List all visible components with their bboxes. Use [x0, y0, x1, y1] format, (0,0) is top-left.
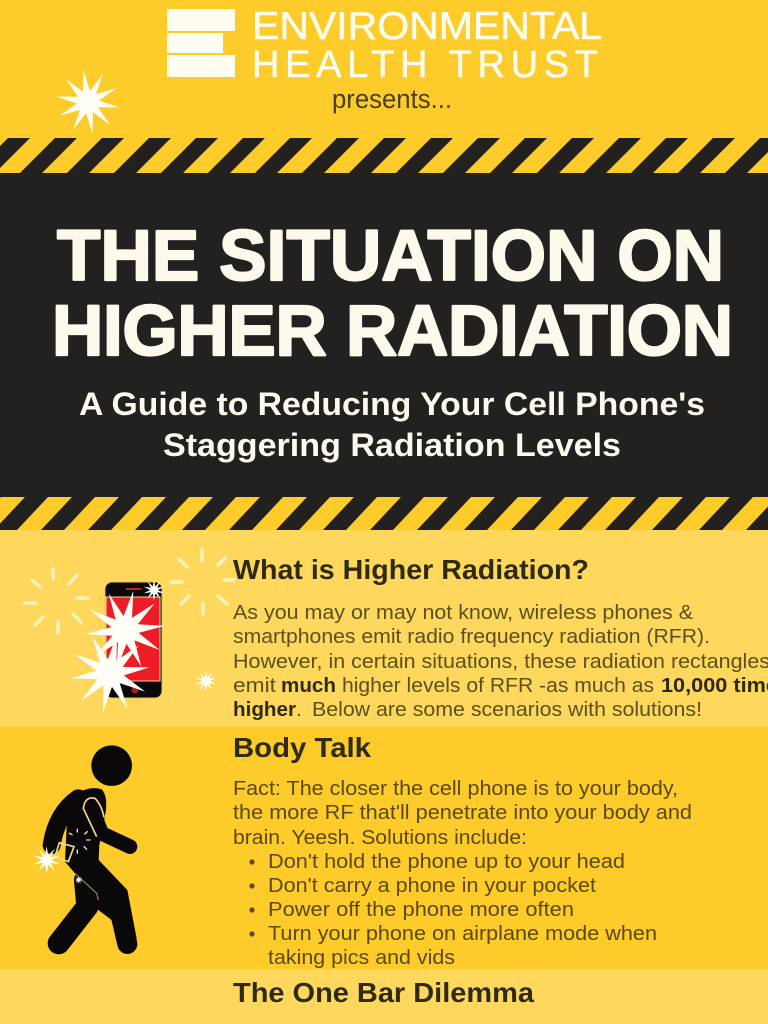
- hazard stripes: bottom: [0, 497, 768, 530]
- text block: Below are some scenarios with solutions!: [312, 698, 702, 721]
- icon: phone: [105, 582, 162, 698]
- text block: [233, 601, 768, 721]
- text block: emit: [233, 674, 276, 697]
- panel: title banner: [0, 173, 768, 498]
- icon: starburst cluster: [66, 579, 216, 719]
- panel: body talk: [0, 727, 768, 969]
- text block: the more RF that'll penetrate into your body and: [233, 801, 692, 824]
- logo: Environmental Health Trust: [167, 5, 602, 86]
- logo wordmark: HEALTH TRUST: [252, 44, 598, 86]
- text block: higher: [233, 698, 296, 721]
- text block: smartphones emit radio frequency radiation (RFR).: [233, 625, 710, 648]
- heading: The One Bar Dilemma: [233, 977, 535, 1008]
- radiation sparks: [69, 829, 90, 853]
- bullet list: Turn your phone on airplane mode when: [268, 922, 657, 945]
- text: presents: presents...: [332, 84, 452, 114]
- hazard stripes: top: [0, 138, 768, 173]
- logo wordmark: ENVIRONMENTAL: [252, 5, 602, 48]
- text block: As you may or may not know, wireless phones &: [233, 601, 693, 624]
- panel: what is higher radiation: [0, 530, 768, 727]
- title: HIGHER RADIATION: [52, 292, 733, 371]
- phone outline: [55, 843, 74, 862]
- text block: Fact: The closer the cell phone is to your body,: [233, 777, 678, 800]
- bullet list: taking pics and vids: [268, 946, 455, 969]
- text block: brain. Yeesh. Solutions include:: [233, 826, 527, 849]
- heading: What is Higher Radiation?: [233, 554, 589, 585]
- bullet list: [249, 850, 657, 969]
- icon: radiation rays right: [171, 549, 234, 614]
- title: [52, 217, 733, 371]
- title: THE SITUATION ON: [57, 217, 724, 296]
- icon: radiation rays left: [25, 569, 88, 633]
- icon: logo blocks: [167, 9, 235, 77]
- subtitle: [79, 386, 705, 463]
- bullet list: Don't hold the phone up to your head: [268, 850, 625, 873]
- text block: .: [296, 698, 302, 721]
- bullet list: Power off the phone more often: [268, 898, 574, 921]
- bullet list: Don't carry a phone in your pocket: [268, 874, 596, 897]
- logo wordmark: [252, 5, 602, 86]
- subtitle: Staggering Radiation Levels: [163, 427, 621, 463]
- panel: header: [0, 0, 768, 175]
- subtitle: A Guide to Reducing Your Cell Phone's: [79, 386, 705, 422]
- text block: [233, 777, 692, 849]
- heading: Body Talk: [233, 732, 372, 763]
- text block: However, in certain situations, these radiation rectangles: [233, 650, 768, 673]
- panel: the one bar dilemma: [0, 969, 768, 1024]
- icon: walking person: [33, 745, 137, 944]
- text block: higher levels of RFR -as much as: [342, 674, 654, 697]
- text block: much: [281, 674, 336, 697]
- icon: white star: [53, 66, 123, 138]
